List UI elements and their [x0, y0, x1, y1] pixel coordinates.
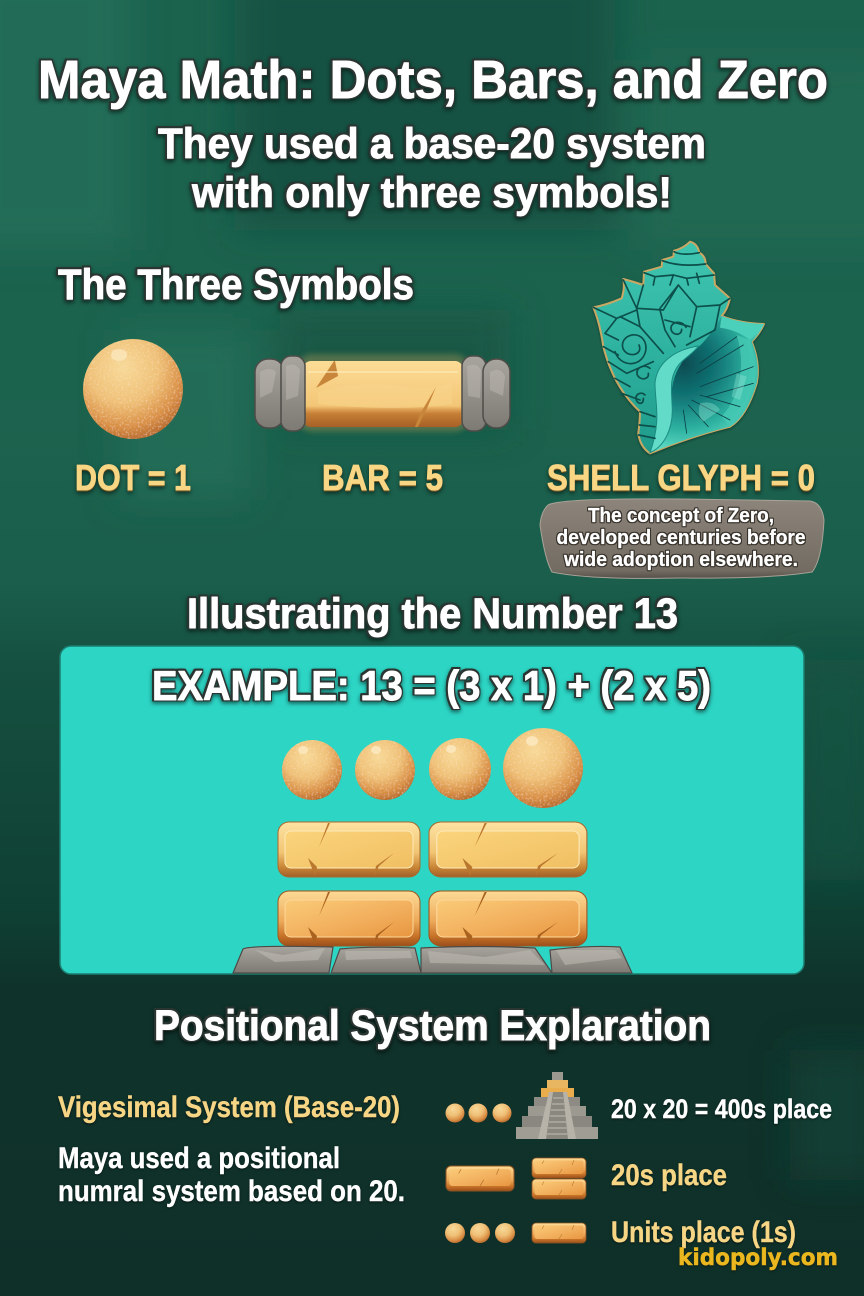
heading: the three symbols: The Three Symbols [58, 261, 414, 309]
brand: kidopoly.com: kidopoly.com [678, 1245, 838, 1271]
text block: vigesimal system: Vigesimal System (Base-20) [58, 1091, 400, 1124]
text block: vigesimal system [58, 1091, 405, 1208]
text block: vigesimal system: numral system based on 20. [58, 1175, 405, 1208]
row: units place [445, 1216, 796, 1249]
row: 20s place [446, 1158, 727, 1199]
icon: wide bar [446, 1166, 514, 1191]
subtitle: with only three symbols! [191, 169, 672, 217]
icon: dot [83, 339, 183, 439]
panel: shell glyph symbol [540, 242, 824, 578]
icon: conch shell [593, 242, 764, 453]
icon: stacked bars [532, 1158, 586, 1199]
label: shell glyph = 0: SHELL GLYPH = 0 [547, 457, 815, 498]
heading: positional system: Positional System Explaration [154, 1002, 711, 1050]
subtitle [158, 120, 706, 217]
heading: illustrating the number 13: Illustrating the Number 13 [187, 590, 678, 638]
label: dot = 1: DOT = 1 [75, 457, 191, 498]
bars row 2 [278, 891, 587, 946]
text block: vigesimal system: Maya used a positional [58, 1142, 340, 1175]
panel: bar symbol [255, 354, 510, 498]
bars row 1 [278, 822, 587, 877]
label: 400s place: 20 x 20 = 400s place [611, 1094, 832, 1124]
callout: concept of zero [540, 499, 824, 578]
icon: bar with stone caps [255, 354, 510, 432]
label: 20s place: 20s place [611, 1159, 727, 1192]
title: Maya Math: Dots, Bars, and Zero [38, 50, 828, 110]
callout: concept of zero: The concept of Zero, [588, 505, 774, 527]
label: units place: Units place (1s) [611, 1216, 796, 1249]
icon: bar [532, 1223, 586, 1243]
panel: dot symbol [75, 339, 191, 498]
icon: pyramid [516, 1072, 598, 1139]
stone base [233, 946, 632, 973]
example equation: EXAMPLE: 13 = (3 x 1) + (2 x 5) [152, 662, 711, 709]
callout: concept of zero: developed centuries before [556, 527, 806, 549]
subtitle: They used a base-20 system [158, 120, 706, 168]
row: 400s place [446, 1072, 832, 1139]
callout: concept of zero: wide adoption elsewhere. [563, 549, 798, 571]
panel: example for 13 [60, 646, 804, 974]
label: bar = 5: BAR = 5 [322, 457, 443, 498]
dots row [282, 728, 583, 808]
icon: three dots [446, 1104, 512, 1122]
icon: three dots [445, 1223, 515, 1243]
